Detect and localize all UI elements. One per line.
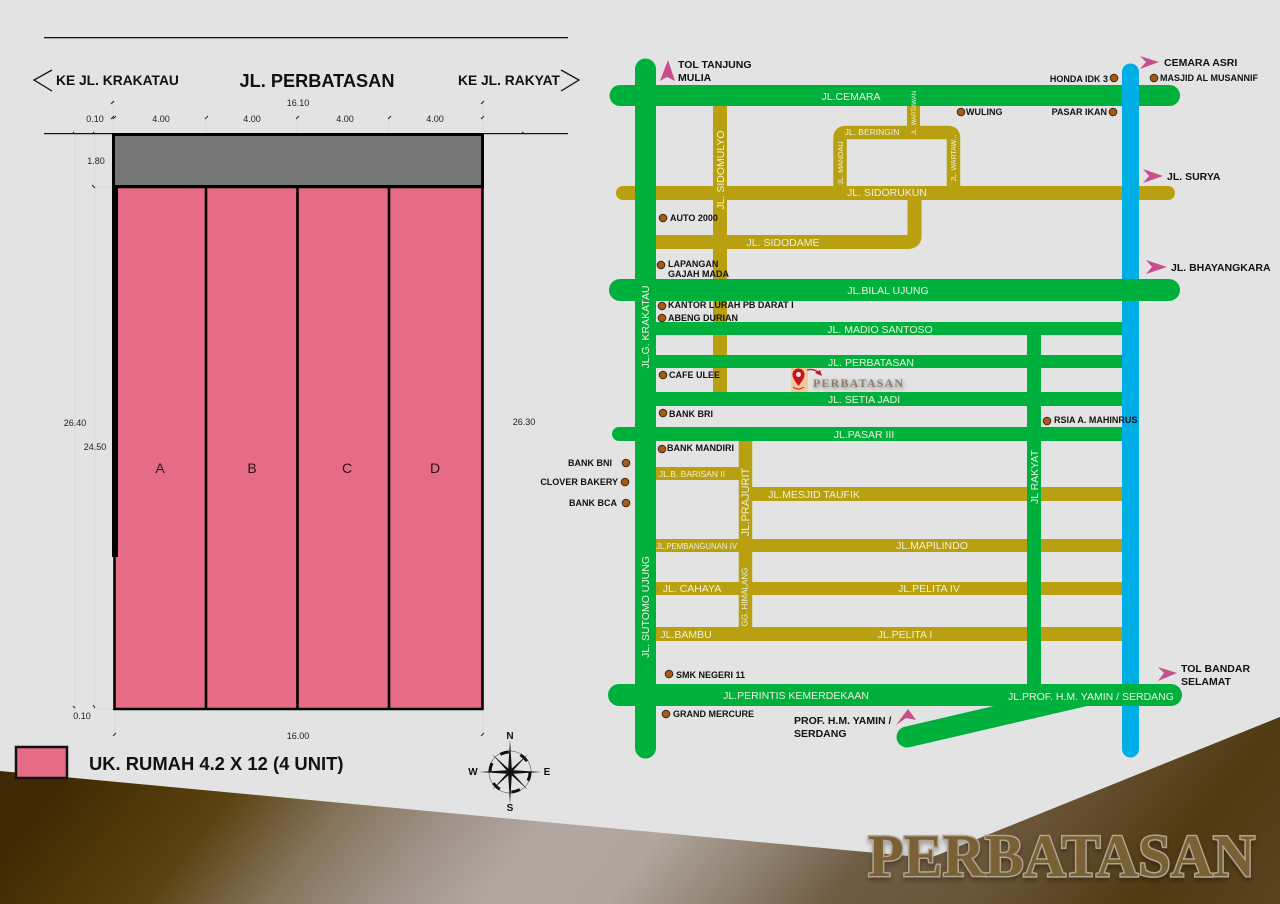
- unit D: [389, 187, 483, 709]
- dimension labels: 26.30: [513, 417, 535, 427]
- destination arrows and labels: JL. SURYA: [1167, 171, 1221, 183]
- arrow: to location name: [807, 369, 822, 376]
- dimension labels: 4.00: [336, 114, 354, 124]
- road labels: [640, 91, 1174, 703]
- dimension labels: 0.10: [86, 114, 104, 124]
- road labels: JL.B. BARISAN II: [659, 469, 725, 479]
- site plan panel: [34, 37, 579, 741]
- dimension labels: 1.80: [87, 156, 105, 166]
- icon: compass rose: S: [507, 803, 514, 814]
- landmarks: CLOVER BAKERY: [540, 477, 618, 487]
- road labels: JL.PELITA IV: [898, 583, 960, 595]
- dimension labels: 24.50: [84, 442, 106, 452]
- right direction arrow and label: [458, 70, 579, 91]
- destination arrows and labels: PROF. H.M. YAMIN /: [794, 715, 892, 727]
- landmarks: RSIA A. MAHINRUS: [1054, 415, 1137, 425]
- road labels: JL. SIDODAME: [747, 237, 819, 249]
- landmarks: ABENG DURIAN: [668, 313, 738, 323]
- landmarks: BANK BRI: [669, 409, 713, 419]
- landmarks: SMK NEGERI 11: [676, 670, 745, 680]
- road labels: JL.CEMARA: [822, 91, 880, 103]
- landmarks: CAFE ULEE: [669, 370, 720, 380]
- road labels: JL.BILAL UJUNG: [847, 285, 929, 297]
- road labels: JL. BERINGIN: [845, 127, 899, 137]
- road labels: JL. SETIA JADI: [828, 394, 900, 406]
- destination arrows and labels: SERDANG: [794, 728, 847, 740]
- road labels: GG. HIMALANG: [740, 568, 750, 626]
- road labels: JL. WARTAWAN: [912, 91, 918, 135]
- landmarks: BANK MANDIRI: [667, 443, 734, 453]
- destination arrows and labels: TOL BANDAR: [1181, 663, 1250, 675]
- landmarks: PASAR IKAN: [1052, 107, 1107, 117]
- road labels: JL.PELITA I: [878, 629, 932, 641]
- unit D: D: [430, 460, 440, 476]
- dimension lines: [75, 100, 483, 735]
- icon: compass rose: [468, 731, 551, 814]
- unit A: [115, 187, 206, 709]
- river over Cemara and Sidorukun: [1122, 85, 1139, 200]
- unit B: [206, 187, 297, 709]
- landmarks: GRAND MERCURE: [673, 709, 754, 719]
- road labels: JL. SIDORUKUN: [847, 187, 927, 199]
- icon: map pin: [791, 368, 808, 392]
- road boundary line: [44, 133, 568, 134]
- watermark title: PERBATASAN: [868, 823, 1255, 889]
- road labels: JL.BAMBU: [660, 629, 712, 641]
- landmarks: BANK BNI: [568, 458, 612, 468]
- icon: compass rose: W: [468, 767, 478, 778]
- dimension labels: 16.10: [287, 98, 309, 108]
- road labels: JL.PROF. H.M. YAMIN / SERDANG: [1008, 691, 1174, 703]
- legend text: UK. RUMAH 4.2 X 12 (4 UNIT): [89, 753, 343, 774]
- legend swatch: [16, 747, 67, 778]
- dimension labels: 0.10: [73, 711, 91, 721]
- road labels: JL. CAHAYA: [663, 583, 721, 595]
- landmarks: BANK BCA: [569, 498, 617, 508]
- dimension ticks: [73, 101, 525, 736]
- road labels: JL. MADIO SANTOSO: [827, 324, 933, 336]
- dimension labels: 26.40: [64, 418, 86, 428]
- landmarks: AUTO 2000: [670, 213, 718, 223]
- legend: [16, 747, 343, 778]
- dimension labels: 4.00: [243, 114, 261, 124]
- location marker: Perbatasan: [791, 368, 903, 392]
- landmarks: MASJID AL MUSANNIF: [1160, 73, 1259, 83]
- road labels: JL.PEMBANGUNAN IV: [656, 542, 738, 551]
- destination arrows and labels: JL. BHAYANGKARA: [1171, 262, 1271, 274]
- road labels: JL.G. KRAKATAU: [640, 285, 652, 369]
- grey setback area: [114, 134, 482, 186]
- watermark title: PERBATASAN: [868, 823, 1255, 889]
- dimension labels: 4.00: [426, 114, 444, 124]
- location map: [540, 56, 1271, 749]
- secondary roads (yellow): [623, 106, 1168, 634]
- road labels: JL. MANDAU: [836, 141, 845, 185]
- road labels: JL RAKYAT: [1029, 449, 1041, 504]
- landmarks: KANTOR LURAH PB DARAT I: [668, 300, 794, 310]
- icon: compass rose: N: [506, 731, 514, 742]
- left direction arrow and label: KE JL. KRAKATAU: [56, 73, 179, 88]
- dimension labels: 16.00: [287, 731, 309, 741]
- background ground shape: [0, 717, 1280, 904]
- road labels: JL. WARTAW...: [951, 134, 958, 182]
- unit outlines: [114, 187, 482, 709]
- road labels: JL.PRAJURIT: [740, 467, 752, 536]
- unit B: B: [247, 460, 257, 476]
- location name: PERBATASAN: [813, 376, 903, 390]
- destination arrows and labels: [660, 56, 1271, 740]
- right direction arrow and label: KE JL. RAKYAT: [458, 73, 561, 88]
- heading: JL. PERBATASAN: JL. PERBATASAN: [240, 71, 394, 91]
- destination arrows and labels: MULIA: [678, 72, 712, 84]
- unit C: C: [342, 460, 352, 476]
- road labels: JL. PERBATASAN: [828, 357, 914, 369]
- road labels: JL.MAPILINDO: [896, 540, 968, 552]
- destination arrows and labels: CEMARA ASRI: [1164, 57, 1237, 69]
- road labels: JL. SIDOMULYO: [715, 130, 727, 210]
- landmarks: LAPANGAN: [668, 259, 718, 269]
- road labels: JL.MESJID TAUFIK: [768, 489, 860, 501]
- road labels: JL.PASAR III: [834, 429, 894, 441]
- thick left wall: [112, 187, 118, 557]
- left direction arrow and label: [34, 70, 179, 91]
- landmarks: GAJAH MADA: [668, 269, 730, 279]
- icon: compass rose: E: [544, 767, 551, 778]
- destination arrows and labels: SELAMAT: [1181, 676, 1232, 688]
- unit C: [297, 187, 389, 709]
- top boundary line: [44, 37, 568, 38]
- unit A: A: [155, 460, 165, 476]
- landmarks: WULING: [966, 107, 1002, 117]
- blue river road: [1122, 72, 1139, 749]
- main roads (green): [612, 69, 1171, 748]
- dimension labels: 4.00: [152, 114, 170, 124]
- road labels: JL.PERINTIS KEMERDEKAAN: [723, 690, 869, 702]
- road labels: JL. SUTOMO UJUNG: [640, 556, 652, 658]
- dimension labels: [64, 98, 535, 741]
- landmarks: [540, 73, 1259, 719]
- destination arrows and labels: TOL TANJUNG: [678, 59, 752, 71]
- landmarks: HONDA IDK 3: [1050, 74, 1108, 84]
